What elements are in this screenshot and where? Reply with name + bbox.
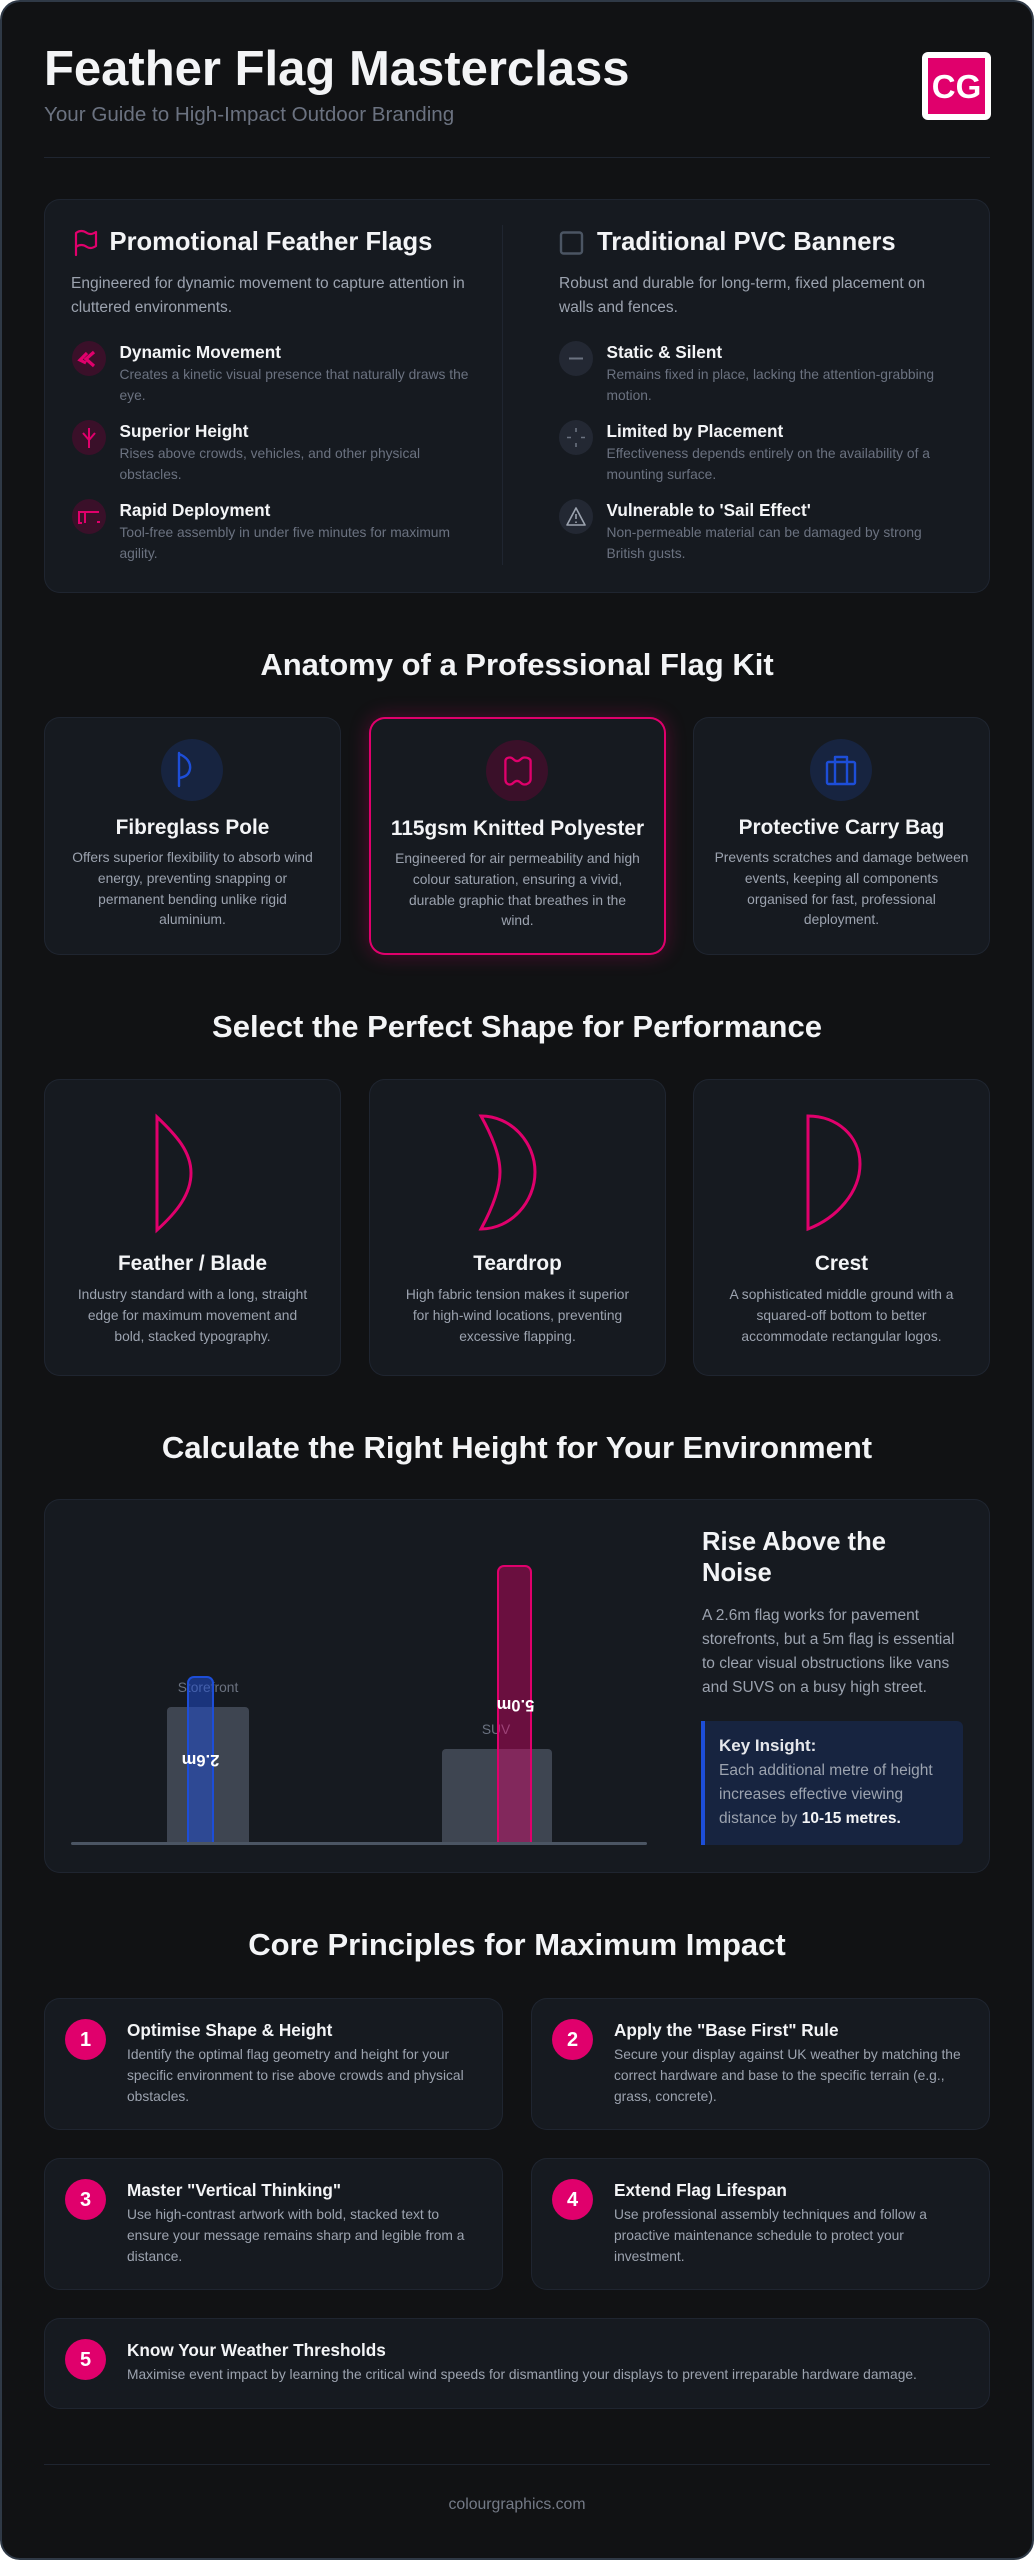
- logo: [922, 52, 991, 120]
- card: fibreglass pole: Offers superior flexibility to absorb wind: [72, 850, 313, 865]
- card: principle 3: distance.: [127, 2249, 182, 2264]
- item: sail effect: [559, 499, 922, 561]
- item: superior height: Rises above crowds, vehicles, and other physical: [120, 446, 420, 460]
- card: feather blade: Feather / Blade: [118, 1252, 267, 1275]
- icon: crosshair: [559, 420, 593, 455]
- card: principle 3: 3: [80, 2189, 91, 2211]
- heading: feather flags: Promotional Feather Flags: [110, 228, 432, 256]
- item: static and silent: motion.: [606, 388, 652, 402]
- logo: CG: [932, 68, 981, 105]
- chart: height comparison: [71, 1565, 647, 1845]
- text: rise above: to clear visual obstructions like vans: [702, 1655, 949, 1672]
- card: carry bag: deployment.: [804, 912, 879, 927]
- card: carry bag: Prevents scratches and damage between: [715, 850, 968, 865]
- card: principle 2: 2: [567, 2029, 578, 2051]
- text: pvc intro: walls and fences.: [559, 299, 678, 316]
- card: crest: [693, 1079, 990, 1376]
- item: static and silent: [559, 341, 934, 402]
- item: dynamic movement: eye.: [120, 388, 146, 402]
- card: knitted polyester: wind.: [501, 913, 534, 928]
- callout: key insight: Key Insight:: [719, 1736, 816, 1755]
- icon: height: [72, 420, 106, 455]
- card: feather blade: Industry standard with a long, straight: [78, 1287, 307, 1302]
- card: principle 5: [44, 2318, 990, 2409]
- text: rise above: and SUVS on a busy high street.: [702, 1679, 927, 1696]
- title: Feather Flag Masterclass: [44, 42, 630, 96]
- icon: feather shape: [156, 1114, 192, 1234]
- card: principle 3: ensure your message remains sharp and legible from a: [127, 2228, 464, 2243]
- card: principle 1: obstacles.: [127, 2089, 189, 2104]
- card: crest: A sophisticated middle ground with a: [730, 1287, 953, 1302]
- item: dynamic movement: [72, 341, 468, 403]
- card: principle 2: Secure your display against UK weather by matching the: [614, 2047, 961, 2062]
- card: feather blade: edge for maximum movement and: [88, 1308, 297, 1323]
- heading: pvc banners: Traditional PVC Banners: [597, 228, 896, 256]
- card: principle 5: Know Your Weather Thresholds: [127, 2340, 386, 2360]
- card: principle 2: grass, concrete).: [614, 2089, 717, 2104]
- item: limited by placement: [559, 420, 930, 482]
- heading: shapes: Select the Perfect Shape for Performance: [212, 1009, 822, 1044]
- card: principle 4: 4: [567, 2189, 578, 2211]
- heading: anatomy: Anatomy of a Professional Flag Kit: [260, 647, 774, 682]
- item: rapid deployment: [72, 499, 450, 561]
- item: rapid deployment: Rapid Deployment: [120, 500, 270, 520]
- card: principle 2: [531, 1998, 990, 2130]
- card: principle 1: 1: [80, 2029, 91, 2051]
- icon: pole: [161, 739, 223, 801]
- item: sail effect: British gusts.: [606, 546, 685, 560]
- card: principle 1: [44, 1998, 503, 2130]
- heading: height: Calculate the Right Height for Your Environment: [162, 1430, 872, 1465]
- callout: key insight: increases effective viewing: [719, 1786, 903, 1803]
- icon: minus: [559, 341, 593, 376]
- callout: key insight: distance by 10-15 metres.: [719, 1810, 901, 1827]
- card: principle 3: Use high-contrast artwork with bold, stacked text to: [127, 2207, 439, 2222]
- card: carry bag: organised for fast, professional: [747, 892, 936, 907]
- card: knitted polyester: Engineered for air permeability and high: [395, 851, 640, 866]
- card: teardrop: High fabric tension makes it superior: [406, 1287, 629, 1302]
- card: knitted polyester: durable graphic that breathes in the: [409, 893, 626, 908]
- card: feather blade: bold, stacked typography.: [114, 1329, 271, 1344]
- vehicle: SUV: [442, 1749, 552, 1842]
- card: knitted polyester: [369, 717, 666, 955]
- heading: rise above: Noise: [702, 1558, 772, 1586]
- text: pvc intro: [559, 275, 925, 316]
- flag: 5.0m: 5.0m: [497, 1696, 534, 1714]
- card: teardrop: for high-wind locations, preventing: [413, 1308, 622, 1323]
- icon: crest shape: [806, 1114, 862, 1232]
- card: principle 2: Apply the "Base First" Rule: [614, 2020, 839, 2040]
- text: feather flags intro: [71, 275, 465, 316]
- card: principle 1: Optimise Shape & Height: [127, 2020, 332, 2040]
- flag: 2.6m: [186, 1676, 214, 1842]
- label: SUV: SUV: [482, 1722, 510, 1737]
- panel: height calculator: [44, 1499, 990, 1873]
- heading: core principles: Core Principles for Maximum Impact: [248, 1927, 786, 1962]
- item: limited by placement: Effectiveness depends entirely on the availability of a: [606, 446, 930, 460]
- icon: deployment: [72, 499, 106, 534]
- label: storefront: Storefront: [178, 1680, 238, 1695]
- item: static and silent: Static & Silent: [606, 342, 722, 362]
- card: knitted polyester: colour saturation, ensuring a vivid,: [413, 872, 622, 887]
- text: rise above: A 2.6m flag works for pavement: [702, 1607, 919, 1624]
- card: carry bag: [693, 717, 990, 955]
- card: fibreglass pole: energy, preventing snapping or: [98, 871, 287, 886]
- footer: colourgraphics.com: [449, 2496, 585, 2513]
- card: principle 5: 5: [80, 2349, 91, 2371]
- callout: key insight: Each additional metre of height: [719, 1762, 933, 1779]
- card: teardrop: Teardrop: [473, 1252, 562, 1275]
- card: principle 4: proactive maintenance schedule to protect your: [614, 2228, 904, 2243]
- item: superior height: [72, 420, 420, 482]
- text: pvc intro: Robust and durable for long-term, fixed placement on: [559, 275, 925, 292]
- item: sail effect: Non-permeable material can be damaged by strong: [606, 524, 922, 540]
- card: principle 4: Use professional assembly techniques and follow a: [614, 2207, 927, 2222]
- card: fibreglass pole: [44, 717, 341, 955]
- item: superior height: obstacles.: [120, 466, 182, 482]
- icon: teardrop shape: [478, 1114, 536, 1230]
- text: feather flags intro: cluttered environments.: [71, 299, 232, 316]
- card: fibreglass pole: aluminium.: [159, 912, 226, 927]
- card: crest: Crest: [815, 1252, 868, 1275]
- item: dynamic movement: Dynamic Movement: [120, 342, 281, 362]
- icon: warning: [559, 499, 593, 534]
- card: teardrop: [369, 1079, 666, 1376]
- card: crest: accommodate rectangular logos.: [741, 1329, 942, 1344]
- heading: rise above: [702, 1528, 886, 1586]
- subtitle: Your Guide to High-Impact Outdoor Branding: [44, 103, 454, 126]
- card: carry bag: events, keeping all components: [745, 871, 938, 886]
- item: static and silent: Remains fixed in place, lacking the attention-grabbing: [606, 366, 934, 382]
- text: feather flags intro: Engineered for dynamic movement to capture attention in: [71, 275, 465, 292]
- card: carry bag: Protective Carry Bag: [739, 816, 944, 839]
- text: rise above: [702, 1607, 954, 1696]
- building: storefront: [167, 1707, 249, 1842]
- callout: key insight: [701, 1721, 963, 1845]
- card: principle 1: Identify the optimal flag geometry and height for your: [127, 2047, 449, 2062]
- card: principle 3: Master "Vertical Thinking": [127, 2180, 341, 2200]
- icon: flag: [74, 230, 98, 256]
- item: limited by placement: mounting surface.: [606, 466, 716, 482]
- heading: rise above: Rise Above the: [702, 1528, 886, 1556]
- text: rise above: storefronts, but a 5m flag is essential: [702, 1631, 954, 1648]
- item: rapid deployment: Tool-free assembly in under five minutes for maximum: [120, 524, 450, 540]
- flag: 5.0m: [497, 1565, 532, 1842]
- card: fibreglass pole: permanent bending unlike rigid: [98, 892, 287, 907]
- ground line: [71, 1842, 647, 1845]
- card: fibreglass pole: Fibreglass Pole: [116, 816, 269, 839]
- card: feather blade: [44, 1079, 341, 1376]
- card: principle 5: Maximise event impact by learning the critical wind speeds for dismantling your displays to prevent irreparable hardware damage.: [127, 2367, 917, 2382]
- icon: bag: [810, 739, 872, 801]
- icon: movement: [72, 341, 106, 376]
- flag: 2.6m: 2.6m: [181, 1751, 219, 1769]
- card: teardrop: excessive flapping.: [459, 1329, 576, 1344]
- card: crest: squared-off bottom to better: [756, 1308, 926, 1323]
- card: principle 4: investment.: [614, 2249, 685, 2264]
- item: superior height: Superior Height: [120, 421, 248, 441]
- item: rapid deployment: agility.: [120, 546, 158, 560]
- card: knitted polyester: 115gsm Knitted Polyester: [391, 817, 644, 840]
- item: dynamic movement: Creates a kinetic visual presence that naturally draws the: [120, 366, 468, 382]
- icon: square: [560, 231, 584, 255]
- card: principle 2: correct hardware and base to the specific terrain (e.g.,: [614, 2068, 945, 2083]
- card: principle 1: specific environment to rise above crowds and physical: [127, 2068, 464, 2083]
- card: principle 4: Extend Flag Lifespan: [614, 2180, 787, 2200]
- item: sail effect: Vulnerable to 'Sail Effect': [606, 500, 811, 520]
- item: limited by placement: Limited by Placement: [606, 421, 783, 441]
- icon: fabric: [486, 740, 548, 801]
- panel: comparison: [44, 199, 990, 593]
- card: principle 4: [531, 2158, 990, 2290]
- card: principle 3: [44, 2158, 503, 2290]
